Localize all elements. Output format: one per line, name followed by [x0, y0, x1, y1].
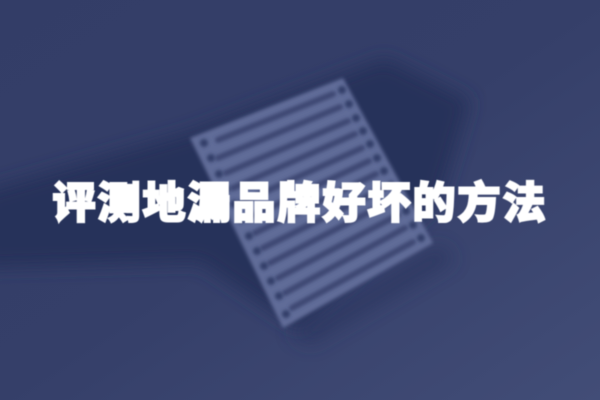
grate plate — [190, 78, 433, 328]
right holes — [338, 86, 425, 242]
left holes — [200, 139, 290, 318]
grate slots — [218, 94, 413, 308]
title: 评测地漏品牌好坏的方法 — [52, 180, 548, 228]
floor drain grate — [190, 78, 433, 328]
dark band behind drain — [0, 58, 470, 330]
drain shadow — [290, 245, 455, 345]
